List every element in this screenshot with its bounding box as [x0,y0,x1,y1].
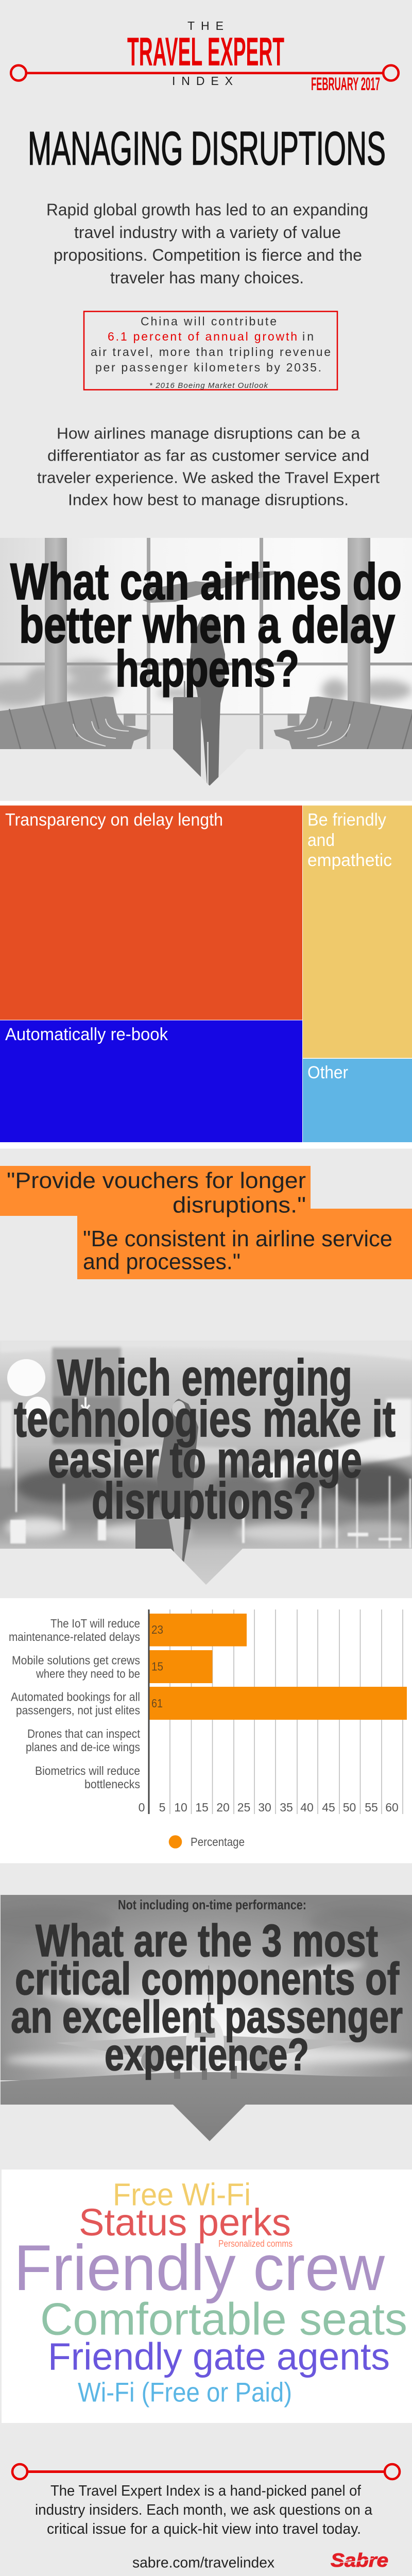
treemap cell: Automatically re-book: Automatically re-book [5,1025,168,1044]
treemap cell: Other: Other [307,1063,348,1082]
chart grid lines [170,1609,403,1814]
intro paragraph: traveler has many choices. [110,268,304,287]
heading: 3 most critical components: experience? [105,2029,309,2080]
bar: Mobile 15 [149,1650,212,1683]
x-axis tick labels: 60 [385,1801,399,1814]
callout: China growth stat: per passenger kilometers by 2035. [95,361,321,374]
masthead word: INDEX: INDEX [172,74,233,88]
word: Wi-Fi (Free or Paid): Wi-Fi (Free or Paid) [78,2377,292,2408]
footer description: critical issue for a quick-hit view into travel today. [47,2521,361,2537]
x-axis tick labels: 5 [159,1801,165,1814]
photo: blurred concourse [0,1341,412,1588]
chart legend [169,1835,245,1849]
panel: treemap of delay responses [0,801,412,1149]
kicker: Not including on-time performance: Not including on-time performance: [118,1897,306,1912]
callout: China growth stat: air travel, more than tripling revenue [91,345,331,359]
category labels: bottlenecks [84,1777,140,1791]
heading: Which emerging technologies: disruptions? [92,1472,316,1529]
heading: What can airlines do better: happens? [115,640,299,697]
bar: IoT 23: 23 [151,1623,163,1636]
footer description: The Travel Expert Index is a hand-picked panel of [50,2483,362,2499]
chart legend: Percentage [191,1835,245,1849]
x-axis tick labels: 35 [280,1801,293,1814]
hero panel: airport concourse with traveler [0,1341,412,1588]
arrow icon on sign [81,1397,90,1410]
word: Friendly crew: Friendly crew [14,2232,385,2304]
treemap cell: Other [303,1059,412,1142]
category labels: Automated bookings for all [11,1690,140,1703]
treemap cell: Be friendly and empathetic: and [307,831,335,850]
x-axis tick labels: 50 [343,1801,356,1814]
treemap cell: Transparency on delay length [0,806,302,1020]
quote: consistent service [77,1209,412,1279]
x-axis tick labels [139,1801,399,1814]
word: Status perks: Status perks [79,2201,291,2244]
treemap cell: Be friendly and empathetic: Be friendly [307,810,386,829]
category labels: passengers, not just elites [16,1703,140,1717]
chart baseline axis [148,1609,149,1814]
hero panel: plane on runway [0,1895,412,2143]
bar: Automated 61: 61 [151,1697,163,1710]
second paragraph: differentiator as far as customer service and [47,446,369,465]
x-axis tick labels: 0 [139,1801,145,1814]
suitcase [173,697,201,777]
second paragraph: traveler experience. We asked the Travel Expert [37,469,380,486]
footer description: industry insiders. Each month, we ask questions on a [35,2502,373,2518]
footer description [35,2483,373,2537]
intro paragraph: travel industry with a variety of value [74,223,341,242]
bar: IoT 23 [149,1614,247,1647]
category labels: The IoT will reduce [50,1617,140,1630]
Sabre logo: Sabre [331,2550,388,2571]
category labels: Drones that can inspect [27,1727,141,1740]
footer URL: sabre.com/travelindex [132,2554,274,2571]
seats left and right [0,697,149,749]
photo: traveler at departure window [0,538,412,791]
bar: Mobile 15: 15 [151,1660,163,1673]
second paragraph: Index how best to manage disruptions. [68,490,349,509]
masthead word: THE: THE [187,19,224,32]
x-axis tick labels: 15 [195,1801,209,1814]
category labels: maintenance-related delays [9,1630,140,1643]
panel: bar chart of emerging technologies [0,1598,412,1863]
masthead rule with end circles [11,65,399,80]
intro paragraph: propositions. Competition is fierce and the [54,246,362,264]
word: Friendly gate agents: Friendly gate agents [48,2335,390,2378]
x-axis tick labels: 20 [216,1801,230,1814]
overhead lamps [7,1359,50,1423]
treemap cell: Automatically re-book [0,1020,302,1142]
heading: What can airlines do better [10,553,402,697]
word: Personalized comms: Personalized comms [218,2239,293,2249]
traveler with suitcase [135,1519,171,1550]
category labels: Biometrics will reduce [35,1764,140,1777]
quote: consistent service: and processes." [83,1249,241,1275]
heading: 3 most critical components [11,1915,403,2080]
quote: consistent service: "Be consistent in airline service [83,1226,392,1251]
heading: Which emerging technologies [14,1349,396,1529]
x-axis tick labels: 55 [365,1801,378,1814]
bar: Automated 61 [149,1687,407,1720]
callout: China growth stat [84,311,337,390]
quote callouts [0,1166,412,1279]
callout: China growth stat: * 2016 Boeing Market Outlook [149,381,269,390]
hero panel: airport window with traveler [0,538,412,791]
category labels: planes and de-ice wings [26,1740,140,1754]
header masthead [11,19,399,94]
callout: China growth stat: 6.1 percent of annual growth [108,330,297,343]
x-axis tick labels: 40 [300,1801,314,1814]
callout: China growth stat: China will contribute [141,314,277,328]
category labels [9,1617,141,1791]
quote: vouchers [0,1166,311,1218]
x-axis tick labels: 10 [174,1801,187,1814]
treemap cell: Be friendly and empathetic: empathetic [307,851,392,870]
second paragraph [37,425,380,509]
panel: word cloud [2,2170,412,2423]
quote: vouchers: disruptions." [173,1192,306,1218]
category labels: Mobile solutions get crews [12,1654,140,1667]
second paragraph: How airlines manage disruptions can be a [57,425,360,442]
treemap cell: Be friendly and empathetic [303,806,412,1058]
plane silhouette [56,1965,355,2080]
category labels: where they need to be [36,1667,140,1681]
x-axis tick labels: 25 [237,1801,250,1814]
intro paragraph [46,200,368,287]
traveler figure [190,617,225,786]
word: Free Wi-Fi: Free Wi-Fi [113,2177,251,2212]
callout: China growth stat: in [302,330,314,343]
photo: airliner at sunset [0,1895,412,2143]
quote: vouchers: "Provide vouchers for longer [7,1168,306,1193]
intro paragraph: Rapid global growth has led to an expanding [46,200,368,219]
footer rule with end circles [12,2464,400,2479]
plane in sky [143,571,278,603]
word: Comfortable seats: Comfortable seats [40,2294,407,2344]
treemap cell: Transparency on delay length: Transparency on delay length [5,810,223,829]
x-axis tick labels: 45 [322,1801,335,1814]
x-axis tick labels: 30 [258,1801,271,1814]
